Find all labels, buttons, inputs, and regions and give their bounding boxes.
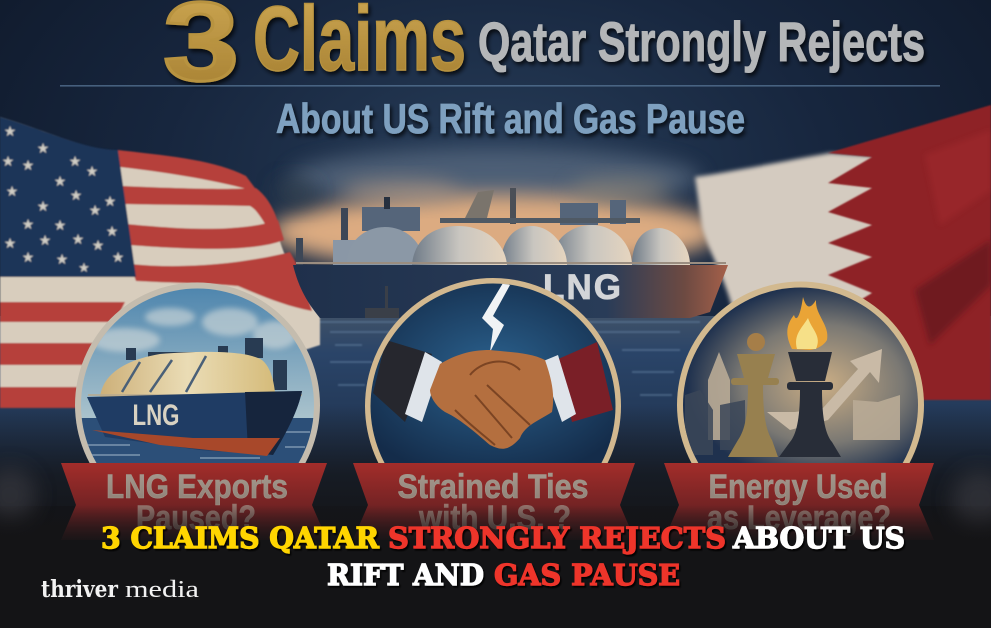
medallion water	[82, 418, 314, 463]
caption line 1: ABOUT US	[732, 521, 905, 555]
flame	[787, 297, 827, 350]
flag stars	[2, 124, 124, 276]
lightning bolt	[482, 283, 510, 352]
banner text: Strained Ties	[398, 468, 588, 506]
sea	[0, 316, 991, 506]
lower panel	[0, 545, 991, 628]
flag stars: ★	[54, 174, 66, 190]
flag stars: ★	[106, 224, 118, 240]
smoky glow behind the ship	[270, 148, 720, 270]
black chess rook	[779, 352, 841, 457]
flag stars: ★	[72, 232, 84, 248]
lower panel fade	[0, 505, 991, 546]
city skyline	[708, 352, 900, 440]
medallion clouds	[90, 308, 297, 352]
logo: thriver media	[41, 576, 199, 603]
flag stars: ★	[104, 194, 116, 210]
rising arrow	[767, 349, 882, 430]
banner: LNG Exports Paused?	[61, 463, 327, 540]
hull	[87, 391, 302, 455]
caption line 2: RIFT AND	[327, 558, 484, 592]
clouds at sides	[0, 467, 991, 530]
logo: thriver media: media	[125, 577, 199, 603]
hull	[293, 265, 728, 318]
banner text: Energy Used	[708, 468, 888, 506]
white chess king	[728, 333, 779, 457]
flag white field	[695, 153, 880, 312]
flag red stripes	[0, 150, 312, 408]
US flag	[0, 117, 320, 408]
deck rail	[88, 394, 302, 396]
flag stars: ★	[22, 158, 34, 174]
flag stars: ★	[4, 124, 16, 140]
cargo domes	[347, 225, 690, 297]
banner text: as Leverage?	[707, 499, 891, 537]
hull label: LNG	[132, 399, 180, 432]
ship deck gear	[126, 338, 287, 390]
subtitle: About US Rift and Gas Pause	[276, 95, 745, 142]
flag canton	[0, 117, 136, 277]
flag stars: ★	[2, 154, 14, 170]
flag stars: ★	[6, 184, 18, 200]
flag stars: ★	[89, 203, 101, 219]
flag stars: ★	[92, 238, 104, 254]
handshake	[430, 350, 553, 449]
caption line 2	[327, 558, 680, 592]
deck rail	[296, 262, 726, 264]
left sleeve	[373, 340, 432, 422]
flag stars: ★	[70, 188, 82, 204]
flag stars: ★	[54, 218, 66, 234]
dark bottom gradient	[0, 405, 991, 545]
flag stars: ★	[112, 250, 124, 266]
tanks	[100, 352, 275, 397]
banner text: LNG Exports	[106, 468, 288, 506]
flag stars: ★	[22, 217, 34, 233]
flag maroon field	[828, 105, 991, 400]
banner: Energy Used as Leverage?	[664, 463, 934, 540]
left cuff	[405, 352, 442, 422]
hull label: LNG	[543, 268, 621, 307]
flag stars: ★	[69, 154, 81, 170]
flag stars: ★	[37, 199, 49, 215]
right cuff	[545, 355, 576, 422]
banner text: with U.S. ?	[418, 499, 571, 537]
logo: thriver media: thriver	[41, 576, 119, 603]
caption line 2: GAS PAUSE	[494, 558, 680, 592]
flag stars: ★	[39, 233, 51, 249]
caption line 1: 3 CLAIMS QATAR	[101, 521, 380, 555]
flag stars: ★	[37, 141, 49, 157]
banner text	[106, 468, 288, 537]
Qatar flag	[695, 105, 991, 400]
panel: energy leverage medallion	[677, 282, 924, 463]
banner text	[398, 468, 588, 537]
banner text: Paused?	[136, 499, 256, 537]
flag stars: ★	[56, 252, 68, 268]
flag stars: ★	[86, 164, 98, 180]
hull red band	[92, 430, 280, 456]
LNG tanker ship	[293, 188, 728, 318]
small tug	[365, 286, 399, 318]
title: 3 Claims	[163, 0, 466, 104]
banner: Strained Ties with U.S.?	[353, 463, 635, 540]
flag stars: ★	[22, 250, 34, 266]
caption line 1: STRONGLY REJECTS	[388, 521, 726, 555]
panel: strained ties medallion	[365, 278, 621, 463]
flag stars: ★	[78, 261, 90, 276]
superstructure and masts	[296, 188, 640, 265]
banner text	[707, 468, 891, 537]
caption line 1	[101, 521, 905, 555]
right sleeve	[556, 342, 613, 422]
divider	[60, 85, 940, 87]
flag stars: ★	[4, 236, 16, 252]
panel: LNG exports medallion	[75, 282, 320, 463]
